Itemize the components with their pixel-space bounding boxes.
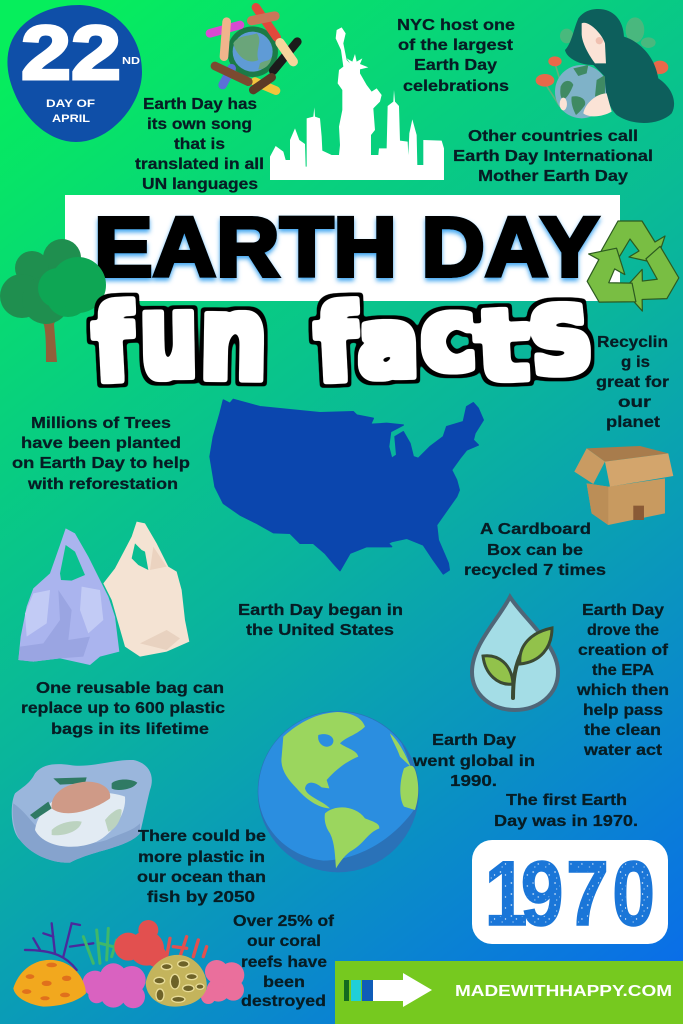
title: fun facts: u xyxy=(139,269,198,405)
icon: coral reef xyxy=(13,920,244,1008)
icon: globe xyxy=(258,711,419,872)
text: cardboard recycling: A Cardboard xyxy=(480,521,591,538)
text: global 1990 xyxy=(412,732,535,790)
text: recycling: great for xyxy=(596,374,669,391)
title: EARTH DAY: EARTH DAY xyxy=(94,200,599,294)
text: Earth Day song: UN languages xyxy=(142,176,258,193)
text: coral reefs: destroyed xyxy=(241,993,326,1010)
title: fun facts: n xyxy=(199,271,269,407)
text: trees planted: have been planted xyxy=(21,435,181,452)
text: Earth Day song: that is xyxy=(174,136,225,153)
text: Earth Day song: Earth Day has xyxy=(143,96,257,113)
text: ocean plastic: our ocean than xyxy=(137,869,266,886)
text: NYC celebrations: of the largest xyxy=(398,37,514,54)
text: International Mother Earth Day: Mother Earth Day xyxy=(478,168,628,185)
icon: reusable bags xyxy=(18,522,189,665)
text: first Earth Day: The first Earth xyxy=(506,792,627,809)
text: global 1990: Earth Day xyxy=(432,732,516,749)
text: EPA: the EPA xyxy=(592,662,654,679)
icon: turtle in plastic bag xyxy=(12,760,152,863)
text: Earth Day song: its own song xyxy=(147,116,252,133)
text: ocean plastic xyxy=(137,828,266,906)
text: Earth Day song: translated in all xyxy=(135,156,264,173)
footer banner xyxy=(335,961,683,1024)
text: EPA xyxy=(576,602,669,759)
title: fun facts: f xyxy=(90,282,138,406)
text: trees planted: on Earth Day to help xyxy=(12,455,190,472)
text: US origin: the United States xyxy=(246,622,394,639)
icon: cardboard box xyxy=(574,446,673,525)
badge: 22nd day of April: 22 xyxy=(21,11,121,96)
badge: 22nd day of April: ND xyxy=(122,55,140,67)
text: recycling: g is xyxy=(621,354,650,371)
text: International Mother Earth Day: Earth Day International xyxy=(453,148,653,165)
text: coral reefs: Over 25% of xyxy=(233,913,335,930)
text: EPA: drove the xyxy=(587,622,659,639)
text: ocean plastic: more plastic in xyxy=(138,849,265,866)
text: trees planted xyxy=(12,415,190,493)
icon: recycling symbol xyxy=(576,221,683,319)
icon: water drop with plant xyxy=(472,597,558,710)
icon: Mother Earth woman holding globe xyxy=(536,9,674,123)
text: EPA: creation of xyxy=(578,642,669,659)
text: ocean plastic: fish by 2050 xyxy=(147,889,255,906)
text: NYC celebrations xyxy=(397,17,515,95)
text: NYC celebrations: NYC host one xyxy=(397,17,515,34)
text: first Earth Day: Day was in 1970. xyxy=(494,813,638,830)
panel: 1970: 1970 xyxy=(484,843,655,946)
text: trees planted: Millions of Trees xyxy=(31,415,171,432)
text: cardboard recycling: recycled 7 times xyxy=(464,562,606,579)
text: recycling: planet xyxy=(606,414,661,431)
text: NYC celebrations: Earth Day xyxy=(414,57,497,74)
text: recycling: Recyclin xyxy=(597,334,668,351)
text: recycling: our xyxy=(618,394,651,411)
text: reusable bag: bags in its lifetime xyxy=(51,721,209,738)
text: EPA: the clean xyxy=(584,722,661,739)
badge: 22nd day of April: APRIL xyxy=(52,113,90,125)
text: EPA: Earth Day xyxy=(582,602,664,619)
icon: striped arrow xyxy=(344,973,432,1007)
text: reusable bag: replace up to 600 plastic xyxy=(21,700,225,717)
text: global 1990: went global in xyxy=(412,753,535,770)
text: coral reefs: reefs have xyxy=(241,954,327,971)
text: coral reefs xyxy=(233,913,335,1010)
text: International Mother Earth Day xyxy=(453,128,653,185)
text: cardboard recycling: Box can be xyxy=(487,542,583,559)
text: EPA: which then xyxy=(576,682,669,699)
text: trees planted: with reforestation xyxy=(27,476,178,493)
icon: hands around the earth xyxy=(210,7,297,91)
title: fun facts xyxy=(90,259,597,407)
text: Earth Day song xyxy=(135,96,264,193)
badge: 22nd day of April: DAY OF xyxy=(46,98,95,110)
title: fun facts: f xyxy=(312,282,362,406)
icon: Statue of Liberty and NYC skyline xyxy=(270,27,444,180)
text: EPA: help pass xyxy=(583,702,663,719)
text: reusable bag: One reusable bag can xyxy=(36,680,224,697)
map: United States xyxy=(210,399,483,574)
footer website text: MADEWITHHAPPY.COM xyxy=(455,983,672,1000)
text: coral reefs: our coral xyxy=(247,933,321,950)
title panel: white band xyxy=(65,195,620,301)
badge: 22nd day of April xyxy=(7,5,142,142)
title: fun facts: s xyxy=(523,259,597,404)
title: fun facts: c xyxy=(417,275,479,395)
text: International Mother Earth Day: Other countries call xyxy=(468,128,638,145)
text: cardboard recycling xyxy=(464,521,606,579)
title: fun facts: t xyxy=(472,288,532,405)
text: first Earth Day xyxy=(494,792,638,830)
text: NYC celebrations: celebrations xyxy=(403,78,509,95)
text: US origin xyxy=(238,602,403,639)
text: recycling xyxy=(596,334,669,431)
text: reusable bag xyxy=(21,680,225,738)
text: US origin: Earth Day began in xyxy=(238,602,403,619)
text: global 1990: 1990. xyxy=(450,773,497,790)
title: fun facts: a xyxy=(356,287,420,400)
text: coral reefs: been xyxy=(263,974,305,991)
text: EPA: water act xyxy=(583,742,663,759)
icon: tree xyxy=(0,239,106,362)
text: ocean plastic: There could be xyxy=(138,828,266,845)
